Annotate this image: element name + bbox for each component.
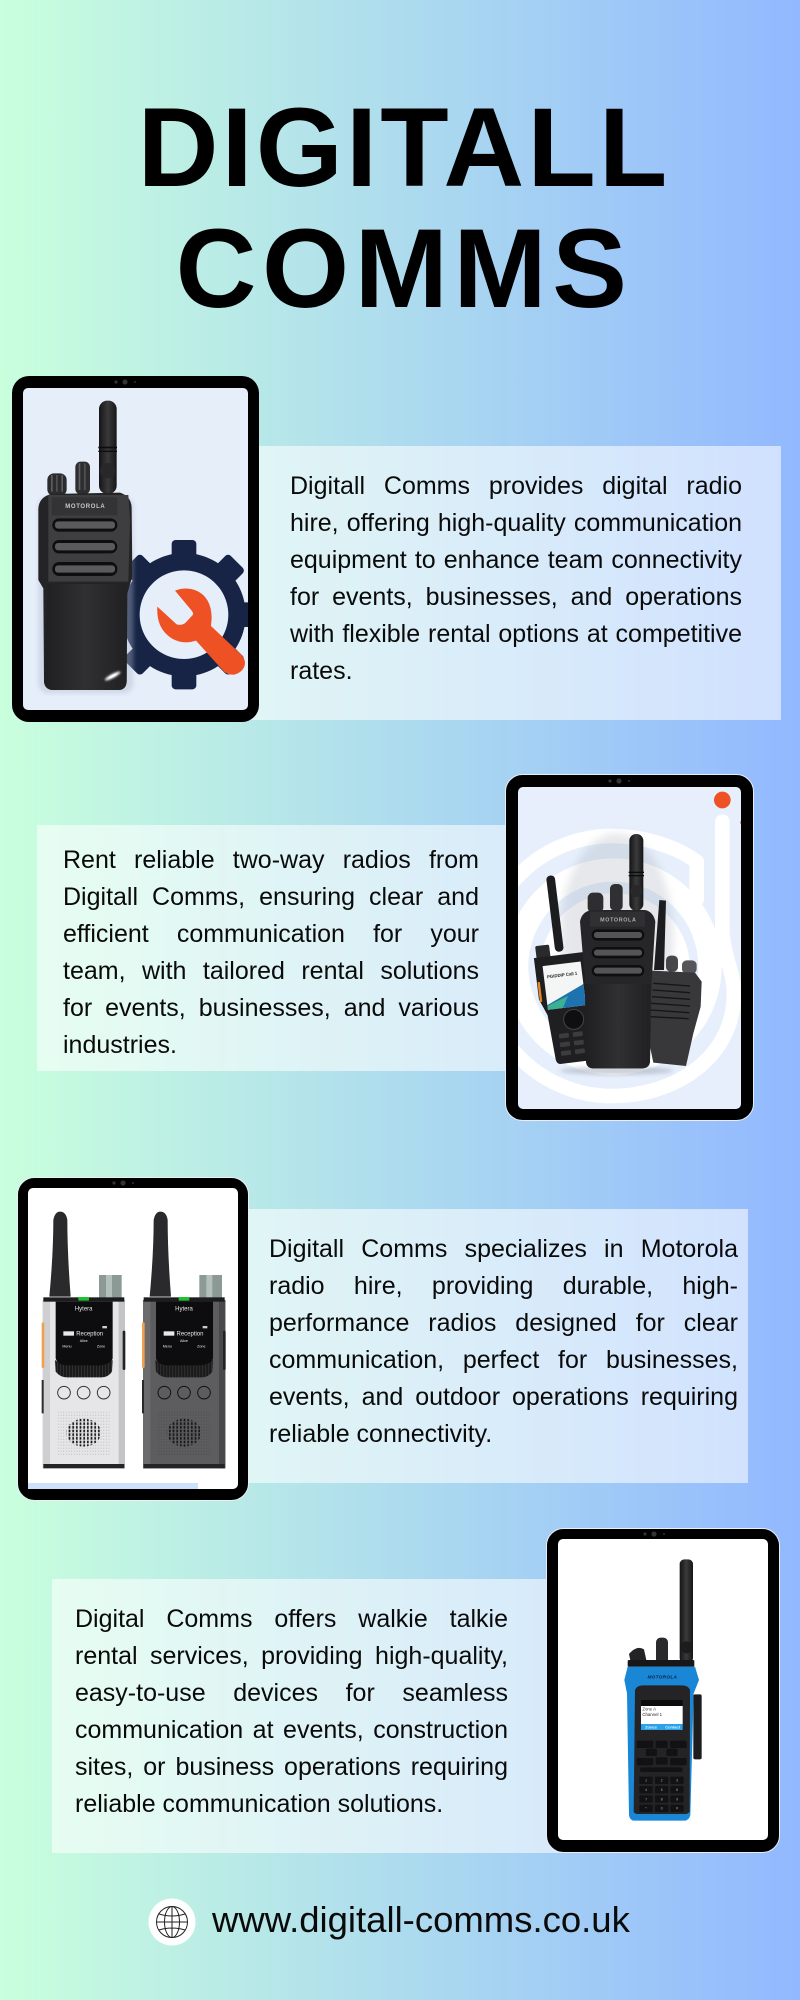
radio: blue motorola: Contact — [665, 1725, 681, 1730]
radio: blue motorola: Zone A — [642, 1706, 656, 1711]
tablet: two hytera radios — [17, 1177, 249, 1501]
text block: digital radio hire: hire, offering high-quality communication — [290, 509, 742, 537]
text block: digital radio hire: rates. — [290, 657, 353, 685]
radio: blue motorola: 2 — [661, 1779, 663, 1783]
icon: camera dots — [112, 1180, 134, 1186]
text block: walkie talkie rental — [75, 1605, 508, 1818]
label: MOTOROLA: MOTOROLA — [65, 504, 105, 510]
text block: two-way radios: Rent reliable two-way radios from — [63, 846, 479, 874]
label: Hytera brand: Hytera — [75, 1307, 93, 1313]
icon: gear — [126, 540, 248, 690]
title — [138, 85, 670, 331]
text block: walkie talkie rental: rental services, providing high-quality, — [75, 1642, 508, 1670]
radio: left keypad handset: PGIDDIP Call 1 — [547, 971, 578, 979]
text block: motorola radio hire — [269, 1235, 738, 1448]
text block: motorola radio hire: performance radios designed for clear — [269, 1309, 738, 1337]
tablet: blue motorola radio — [546, 1528, 780, 1853]
text block: two-way radios: for events, businesses, and various — [63, 994, 479, 1022]
radio: silver hytera — [42, 1212, 125, 1468]
icon: globe — [148, 1898, 196, 1946]
text block: walkie talkie rental: sites, or business operations requiring — [75, 1753, 508, 1781]
radio: left keypad handset — [534, 876, 586, 1064]
radio: grey hytera — [142, 1212, 226, 1468]
tablet: motorola radio and gear — [12, 376, 259, 722]
radio: right dark handset — [650, 900, 702, 1066]
icon: camera dots — [114, 379, 136, 385]
panel: motorola radio hire text — [235, 1209, 748, 1483]
text block: two-way radios: industries. — [63, 1031, 177, 1059]
website url: www.digitall-comms.co.uk — [212, 1899, 630, 1940]
panel: digital radio hire text — [240, 446, 781, 720]
radio: blue motorola: Channel 1 — [642, 1712, 663, 1717]
text block: digital radio hire: equipment to enhance team connectivity — [290, 546, 742, 574]
text block: digital radio hire: with flexible rental options at competitive — [290, 620, 742, 648]
radio: blue motorola: Zones — [645, 1725, 658, 1730]
icon: camera dots — [643, 1531, 665, 1537]
radio: blue motorola: * — [645, 1807, 647, 1811]
radio: blue motorola: 0 — [661, 1807, 663, 1811]
radio: blue motorola: 5 — [661, 1788, 663, 1792]
text block: walkie talkie rental: easy-to-use devices for seamless — [75, 1679, 508, 1707]
radio: blue motorola: 4 — [645, 1788, 647, 1792]
title line: COMMS: COMMS — [176, 206, 632, 331]
radio: grey hytera: Alice — [180, 1339, 188, 1343]
label: MOTOROLA: MOTOROLA — [647, 1674, 678, 1679]
text block: digital radio hire — [290, 472, 742, 685]
logo: white rings — [482, 822, 734, 1096]
text block: two-way radios: Digitall Comms, ensuring clear and — [63, 883, 479, 911]
tablet: group of radios with logo — [505, 774, 754, 1121]
radio: center motorola — [580, 834, 655, 1068]
radio: blue motorola — [624, 1559, 702, 1821]
radio: blue motorola: # — [676, 1807, 678, 1811]
icon: red dot — [714, 792, 731, 808]
text block: digital radio hire: for events, businesses, and operations — [290, 583, 742, 611]
lens flare — [104, 670, 121, 682]
radio: blue motorola: 7 — [645, 1797, 647, 1801]
panel: two-way radios text — [37, 825, 517, 1071]
title line: DIGITALL: DIGITALL — [138, 85, 670, 210]
panel: walkie talkie rental text — [52, 1579, 562, 1853]
radio: grey hytera: Menu — [163, 1344, 172, 1348]
radio: silver hytera: Menu — [62, 1344, 72, 1348]
text block: two-way radios: efficient communication for your — [63, 920, 479, 948]
text block: motorola radio hire: reliable connectivity. — [269, 1420, 492, 1448]
text block: motorola radio hire: events, and outdoor operations requiring — [269, 1383, 738, 1411]
text block: walkie talkie rental: reliable communication solutions. — [75, 1790, 443, 1818]
text block: walkie talkie rental: Digital Comms offers walkie talkie — [75, 1605, 508, 1633]
footer: website — [148, 1898, 630, 1946]
radio: blue motorola: 9 — [676, 1797, 678, 1801]
text block: motorola radio hire: radio hire, providing durable, high- — [269, 1272, 738, 1300]
radio: motorola handheld — [38, 401, 133, 693]
label: MOTOROLA: MOTOROLA — [600, 917, 636, 923]
radio: silver hytera: Alice — [80, 1339, 88, 1343]
text block: two-way radios — [63, 846, 479, 1059]
text block: walkie talkie rental: communication at events, construction — [75, 1716, 508, 1744]
radio: grey hytera: Reception — [177, 1332, 203, 1338]
radio: blue motorola: 1 — [645, 1779, 647, 1783]
radio: blue motorola: 3 — [676, 1779, 678, 1783]
icon: camera dots — [608, 778, 630, 784]
radio: blue motorola: 8 — [661, 1797, 663, 1801]
text block: motorola radio hire: Digitall Comms specializes in Motorola — [269, 1235, 738, 1263]
text block: two-way radios: team, with tailored rental solutions — [63, 957, 479, 985]
icon: wrench — [157, 588, 245, 675]
text block: motorola radio hire: communication, perfect for businesses, — [269, 1346, 738, 1374]
radio: grey hytera: Zone — [197, 1344, 206, 1348]
text block: digital radio hire: Digitall Comms provides digital radio — [290, 472, 742, 500]
label: Hytera brand: Hytera — [175, 1307, 193, 1313]
radio: silver hytera: Zone — [97, 1344, 105, 1348]
radio: silver hytera: Reception — [76, 1332, 103, 1338]
radio: blue motorola: 6 — [676, 1788, 678, 1792]
